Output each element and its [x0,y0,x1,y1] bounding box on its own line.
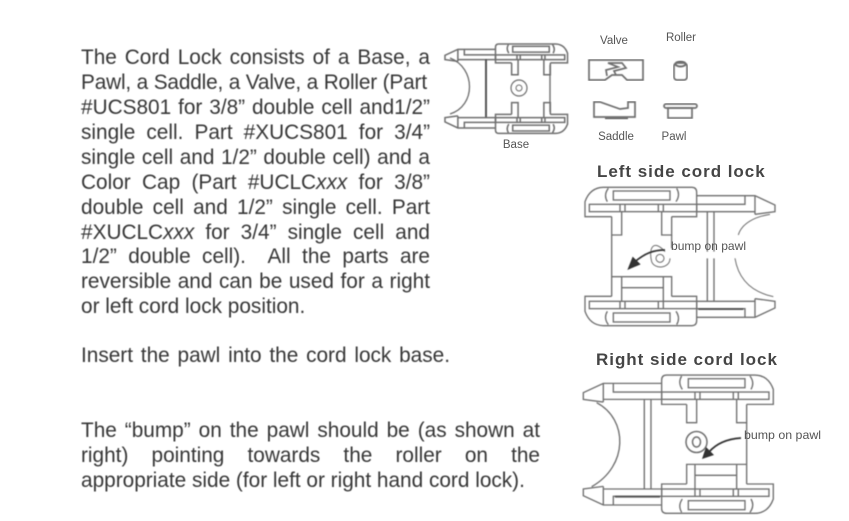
diagram: left side cord lock [585,187,775,326]
label: saddle: Saddle [598,131,634,143]
heading: left side cord lock: Left side cord lock [597,162,766,181]
label: valve: Valve [600,35,628,47]
text block: cord lock parts description: or left cord lock position. [81,295,305,318]
icon: saddle [594,102,635,118]
text block: cord lock parts description: single cell. Part #XUCS801 for 3/4” [81,121,430,144]
text block: cord lock parts description: #XUCLCxxx for 3/4” single cell and [81,221,430,244]
text block: bump direction: appropriate side (for left or right hand cord lock). [81,469,525,492]
text block: cord lock parts description: single cell and 1/2” double cell) and a [81,146,430,169]
text block: cord lock parts description: The Cord Lock consists of a Base, a [81,46,430,69]
icon: valve [589,60,643,80]
label: pawl: Pawl [662,131,686,143]
icon: pawl [664,104,697,118]
text block: cord lock parts description: #UCS801 for 3/8” double cell and1/2” [81,96,430,119]
arrow: bump on pawl, left [627,250,665,270]
label: base: Base [503,139,529,151]
diagram: base [445,44,568,133]
label: bump on pawl, right: bump on pawl [744,428,821,442]
text block: bump direction: The “bump” on the pawl should be (as shown at [81,419,540,442]
text block: cord lock parts description: Color Cap (Part #UCLCxxx for 3/8” [81,171,430,194]
text block: cord lock parts description: 1/2” double cell). All the parts are [81,245,430,268]
arrow: bump on pawl, right [702,438,741,459]
label: roller: Roller [666,32,696,44]
text block: cord lock parts description: reversible and can be used for a right [81,270,430,293]
icon: roller [674,62,687,80]
text block: cord lock parts description [80,46,431,318]
text block: cord lock parts description: double cell and 1/2” single cell. Part [81,196,430,219]
diagram: right side cord lock [583,375,773,513]
label: bump on pawl, left: bump on pawl [671,239,746,253]
text block: insert the pawl: Insert the pawl into the cord lock base. [81,344,450,367]
text block: cord lock parts description: Pawl, a Saddle, a Valve, a Roller (Part [81,71,427,94]
heading: right side cord lock: Right side cord lock [596,350,778,369]
text block: bump direction [80,419,541,492]
text block: bump direction: right) pointing towards the roller on the [81,444,540,467]
